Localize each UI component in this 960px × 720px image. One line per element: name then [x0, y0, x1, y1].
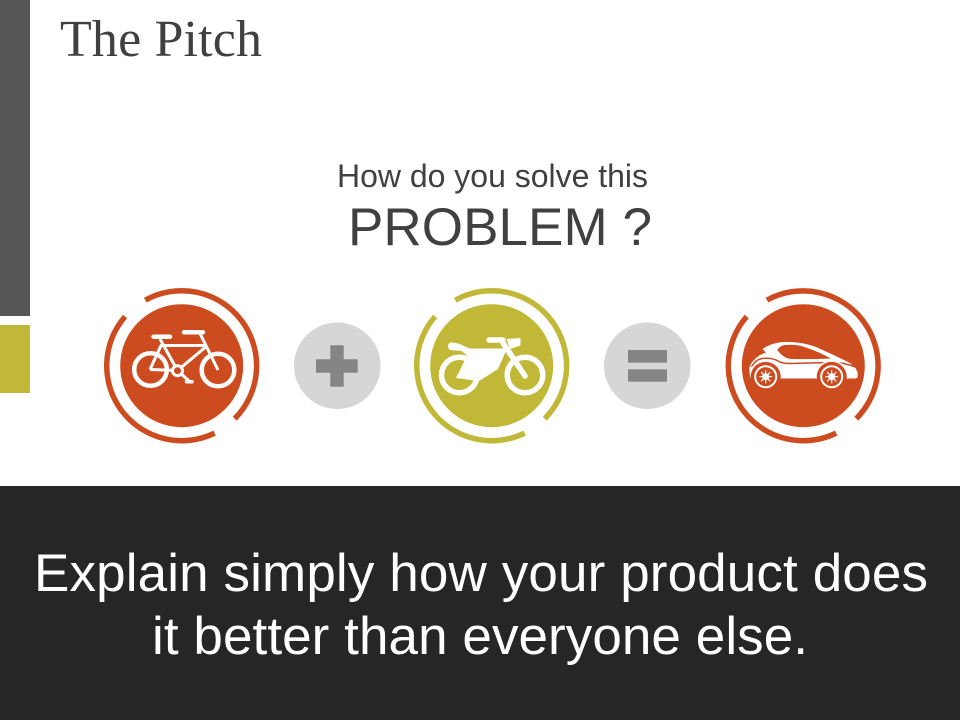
icon: equals in grey circle — [604, 322, 691, 409]
problem heading: PROBLEM ? — [348, 198, 652, 257]
subheading: How do you solve this — [337, 158, 648, 194]
bottom dark band — [0, 486, 960, 720]
icon: bicycle in orange ring — [107, 291, 257, 441]
icon: car in orange ring — [728, 291, 878, 441]
bottom statement: Explain simply how your product does — [34, 544, 928, 603]
title: The Pitch — [60, 11, 262, 68]
left accent bar: olive — [0, 325, 30, 393]
icon: plus in grey circle — [294, 322, 381, 409]
left accent bar: grey — [0, 0, 30, 316]
bottom statement — [34, 544, 928, 666]
icon: motorcycle in olive ring — [417, 291, 567, 441]
bottom statement: it better than everyone else. — [152, 607, 808, 666]
